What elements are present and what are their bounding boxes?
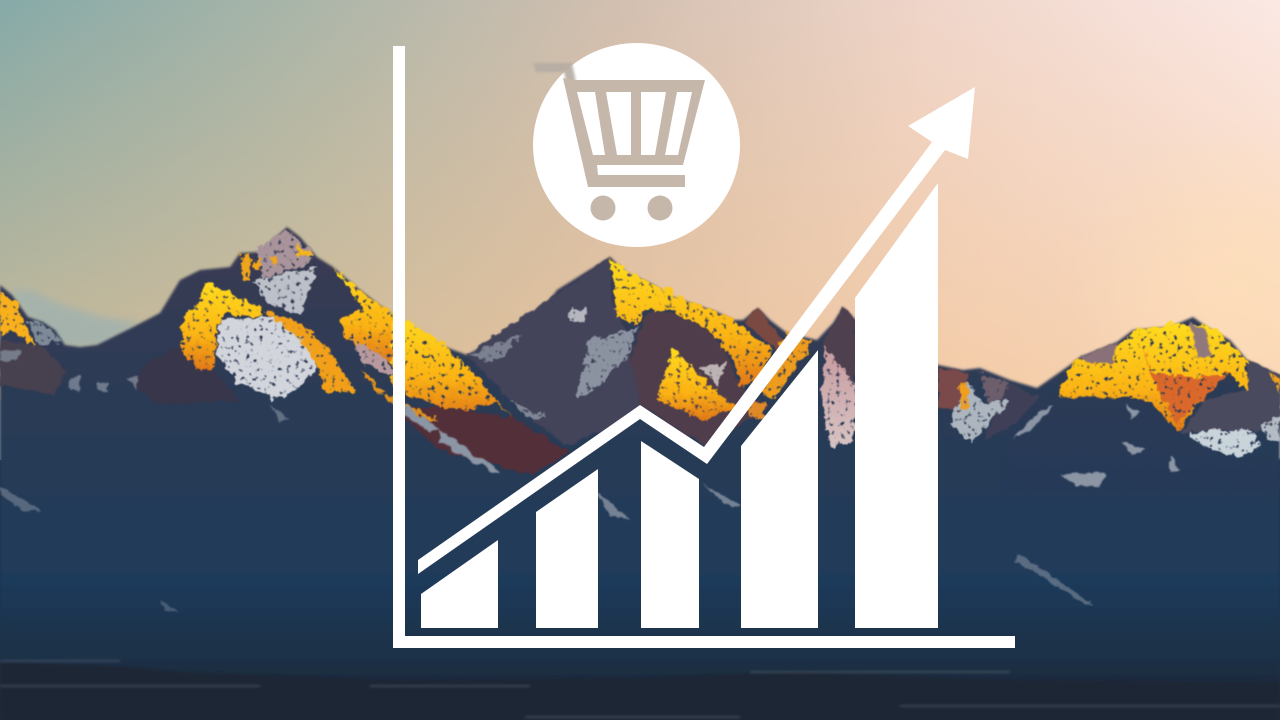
snow flecks on dark slopes xyxy=(0,350,1180,612)
valley floor xyxy=(0,662,1280,720)
shadowed rock faces xyxy=(0,257,1280,475)
chart axes xyxy=(393,46,1015,648)
cart wheel right xyxy=(648,196,672,220)
badge circle xyxy=(533,43,740,247)
bar 4 xyxy=(741,350,818,628)
bar 3 xyxy=(641,441,699,628)
snow and rock patches xyxy=(28,229,1280,458)
cart basket xyxy=(563,78,705,187)
mountain silhouette xyxy=(0,227,1280,720)
bar 1 xyxy=(421,540,498,628)
bar 2 xyxy=(536,469,598,628)
shopping cart badge xyxy=(533,43,740,247)
sky background xyxy=(0,0,1280,460)
mountain range photo backdrop xyxy=(0,227,1280,720)
ridge rock details xyxy=(1000,322,1280,490)
cart handle xyxy=(533,63,576,82)
bar 5 xyxy=(855,183,938,628)
trend arrow xyxy=(418,87,975,574)
cart wheel left xyxy=(590,196,616,220)
sunlit gold faces xyxy=(0,243,1280,432)
bar and line chart xyxy=(393,46,1015,648)
